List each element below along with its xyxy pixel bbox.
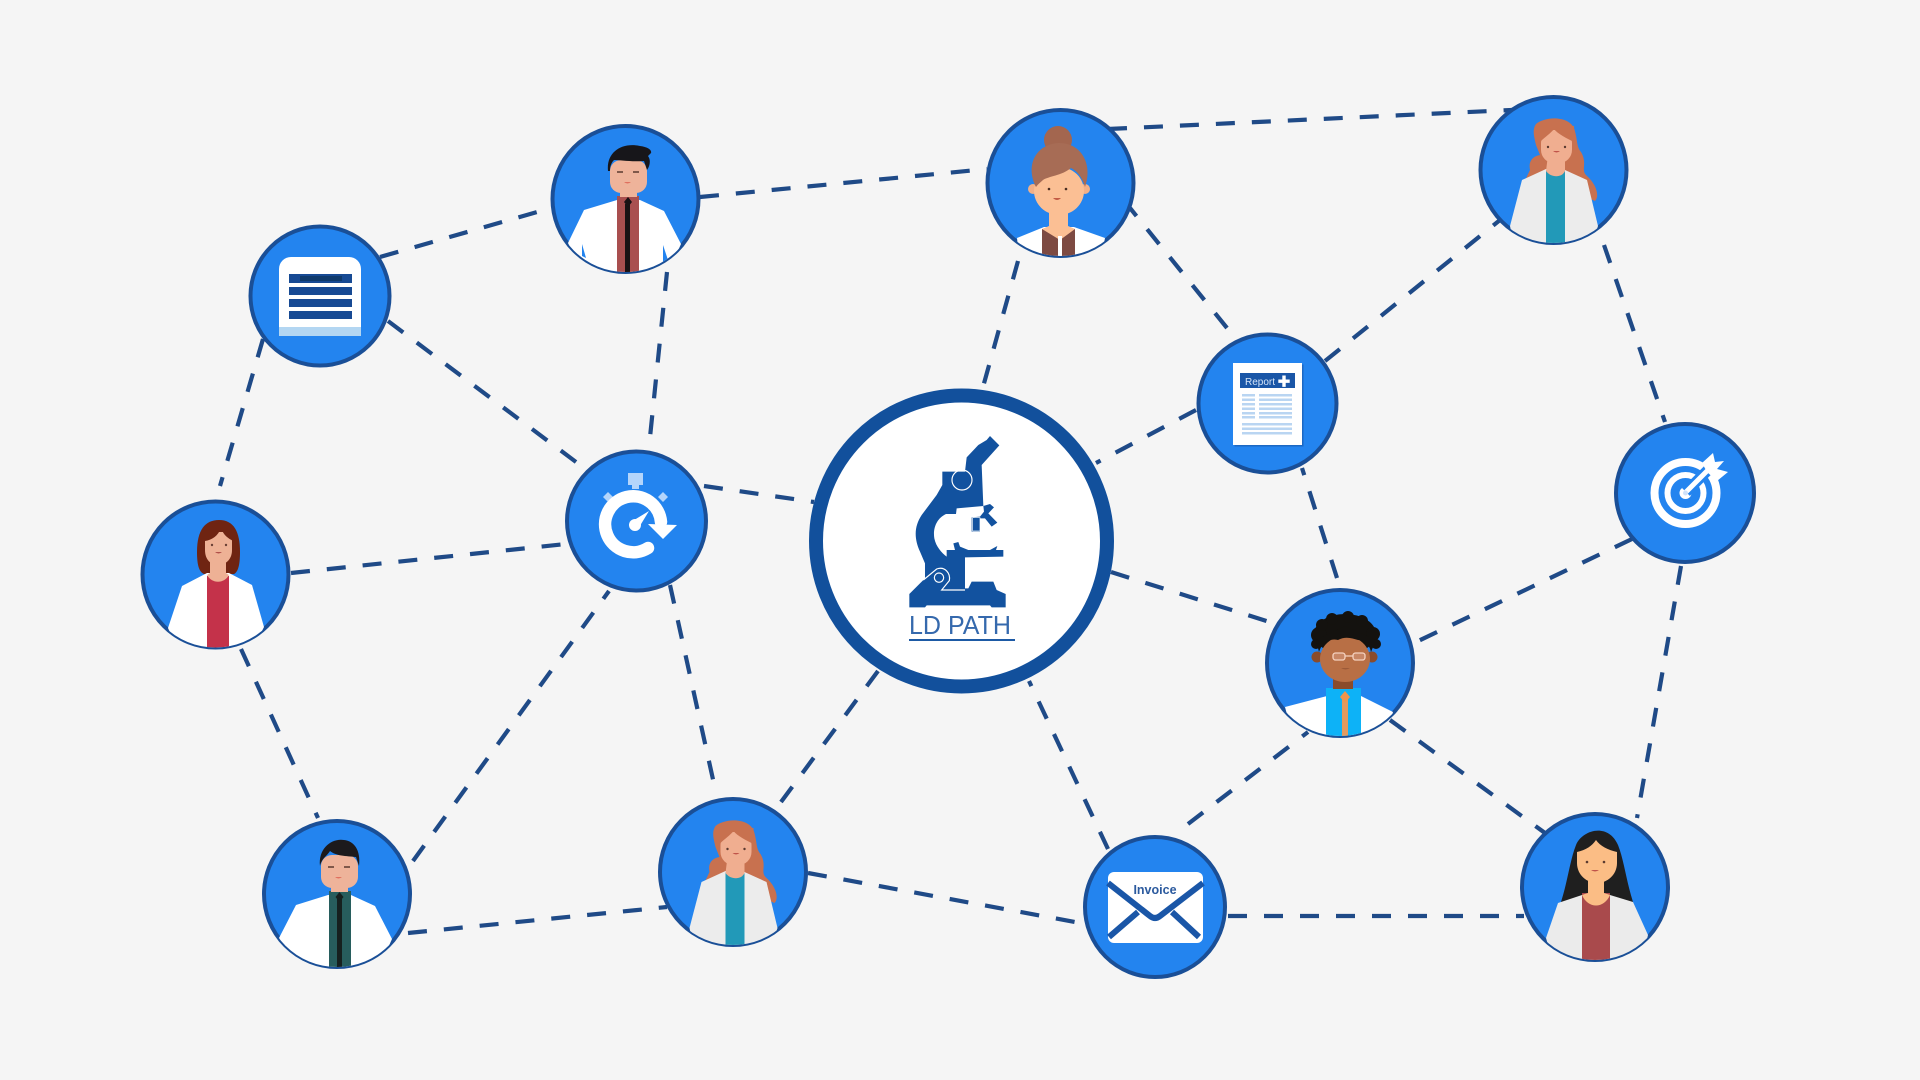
link: target to dark-haired woman bbox=[1637, 566, 1681, 818]
node: woman with brown hair bbox=[142, 502, 288, 655]
icon: microscope bbox=[909, 436, 1006, 607]
link: list to doctor bbox=[380, 208, 551, 257]
link: doctor to timer bbox=[649, 272, 667, 447]
icon: stopwatch with arrow bbox=[603, 473, 677, 552]
network diagram bbox=[140, 95, 1756, 979]
link: curly-haired man to report bbox=[1302, 468, 1337, 578]
link: invoice to curly-haired man bbox=[1188, 732, 1308, 824]
person: lower red-haired woman bbox=[690, 820, 778, 952]
node: invoice envelope icon bbox=[1085, 837, 1225, 977]
link: list to timer bbox=[388, 321, 588, 471]
link: timer to lower woman bbox=[670, 585, 716, 793]
link: curly-haired man to hub bbox=[1111, 572, 1276, 624]
person: brown-haired woman bbox=[168, 520, 264, 655]
node: woman with hair bun bbox=[988, 110, 1134, 265]
hub label: LD PATH bbox=[909, 610, 1011, 640]
central hub: LD PATH microscope bbox=[816, 396, 1107, 686]
link: lower woman to hub bbox=[781, 671, 878, 802]
link: second doctor to timer bbox=[413, 591, 609, 861]
link: target to curly-haired man bbox=[1414, 539, 1632, 643]
link: report to bun woman bbox=[1130, 208, 1227, 328]
node: lower woman with teal shirt bbox=[660, 799, 806, 952]
node: target icon bbox=[1616, 424, 1754, 562]
person: red-haired woman bbox=[1510, 118, 1598, 250]
link: curly-haired man to dark-haired woman bbox=[1390, 720, 1545, 833]
node: doctor with red shirt bbox=[552, 126, 698, 280]
icon: dartboard with arrow bbox=[1654, 453, 1728, 524]
link: list to brown-haired woman bbox=[220, 339, 263, 486]
node: curly-haired man with glasses bbox=[1267, 590, 1413, 745]
icon: invoice envelope: Invoice bbox=[1133, 883, 1177, 897]
dashed connection lines bbox=[220, 110, 1681, 933]
person: male doctor bbox=[568, 145, 681, 280]
link: invoice to hub bbox=[1029, 681, 1108, 849]
link: brown-haired woman to timer bbox=[291, 544, 566, 573]
person: dark-haired woman bbox=[1546, 831, 1648, 970]
link: report to red-haired woman bbox=[1325, 220, 1500, 361]
node: stopwatch icon bbox=[567, 452, 706, 590]
link: red-haired woman to target bbox=[1604, 245, 1665, 422]
icon: list card bbox=[279, 257, 361, 336]
link: bun woman to red-haired woman bbox=[1108, 110, 1512, 129]
node: woman with long dark hair bbox=[1522, 814, 1668, 970]
link: invoice to dark-haired woman bbox=[1228, 914, 1524, 918]
node: doctor with dark green shirt bbox=[264, 821, 410, 975]
node: red-haired woman with teal shirt bbox=[1480, 97, 1626, 250]
person: bun woman bbox=[1017, 126, 1105, 265]
icon: report document: Report bbox=[1245, 376, 1275, 388]
node: report icon bbox=[1198, 334, 1336, 472]
link: bun woman to hub bbox=[983, 261, 1018, 387]
link: report to hub bbox=[1096, 410, 1196, 463]
person: curly-haired man bbox=[1285, 611, 1393, 745]
link: second doctor to lower woman bbox=[408, 907, 667, 933]
link: lower woman to invoice bbox=[808, 873, 1086, 924]
node: list document icon bbox=[250, 226, 390, 366]
link: brown-haired woman to second doctor bbox=[241, 649, 318, 818]
person: second male doctor bbox=[279, 840, 392, 975]
link: doctor to bun woman bbox=[700, 169, 987, 197]
link: timer to hub bbox=[704, 486, 814, 502]
hair: afro bbox=[1311, 611, 1381, 649]
